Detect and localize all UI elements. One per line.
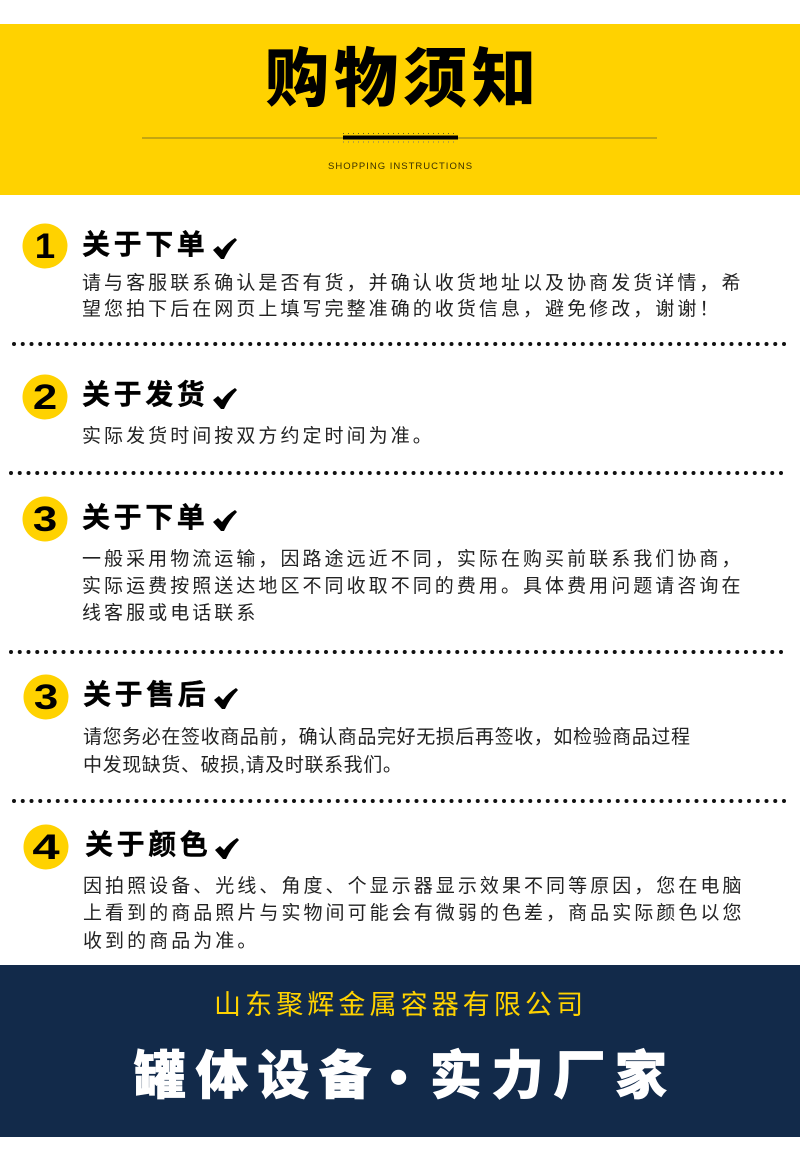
dotted divider 1 [12,342,786,346]
section 4: after-sales [24,674,691,776]
body line 1: 请您务必在签收商品前，确认商品完好无损后再签收，如检验商品过程 [83,727,691,748]
slogan: • [390,1049,407,1105]
body line 2: 中发现缺货、破损,请及时联系我们。 [83,755,402,776]
check mark [213,238,237,259]
number badge 3 [22,496,68,542]
dotted divider 2 [9,471,783,475]
number badge 4: 4 [32,828,60,867]
body line 1: 一般采用物流运输，因路途远近不同，实际在购买前联系我们协商， [82,549,744,570]
number badge 3: 3 [34,678,58,717]
English subtitle: SHOPPING INSTRUCTIONS [328,161,473,172]
number badge 2: 2 [33,378,57,417]
heading: 关于售后 [83,679,209,710]
heading: 关于颜色 [85,829,211,860]
title: 购物须知 [265,43,541,115]
heading: 关于下单 [82,502,208,533]
body line 2: 上看到的商品照片与实物间可能会有微弱的色差，商品实际颜色以您 [83,903,745,924]
body line 2: 望您拍下后在网页上填写完整准确的收货信息，避免修改，谢谢！ [82,299,721,320]
section 2: shipping [22,374,435,447]
dotted divider 4 [12,799,786,803]
heading: 关于下单 [82,229,208,260]
body line 3: 收到的商品为准。 [83,931,259,952]
section 3: freight [22,496,744,624]
number badge 4 [24,824,68,870]
number badge 3: 3 [33,500,57,539]
company name: 山东聚辉金属容器有限公司 [214,990,587,1020]
divider with ticked bar [142,133,657,142]
number badge 1: 1 [35,227,55,266]
number badge 2 [22,374,68,420]
heading: 关于发货 [82,379,208,410]
body line 2: 实际运费按照送达地区不同收取不同的费用。具体费用问题请咨询在 [82,576,744,597]
body line 1: 请与客服联系确认是否有货，并确认收货地址以及协商发货详情，希 [82,273,744,294]
section 1: order [22,224,744,320]
footer band [0,965,800,1137]
number badge 3 [24,674,68,720]
body line 3: 线客服或电话联系 [82,603,258,624]
header band [0,24,800,195]
check mark [213,388,237,409]
check mark [214,688,238,709]
dotted divider 3 [9,650,783,654]
slogan: 罐体设备 实力厂家 [134,1048,677,1106]
check mark [213,510,237,531]
check mark [215,838,239,859]
body line 1: 因拍照设备、光线、角度、个显示器显示效果不同等原因，您在电脑 [83,876,745,897]
section 5: colour [24,824,745,952]
number badge 1 [22,224,68,268]
body line: 实际发货时间按双方约定时间为准。 [82,426,435,447]
